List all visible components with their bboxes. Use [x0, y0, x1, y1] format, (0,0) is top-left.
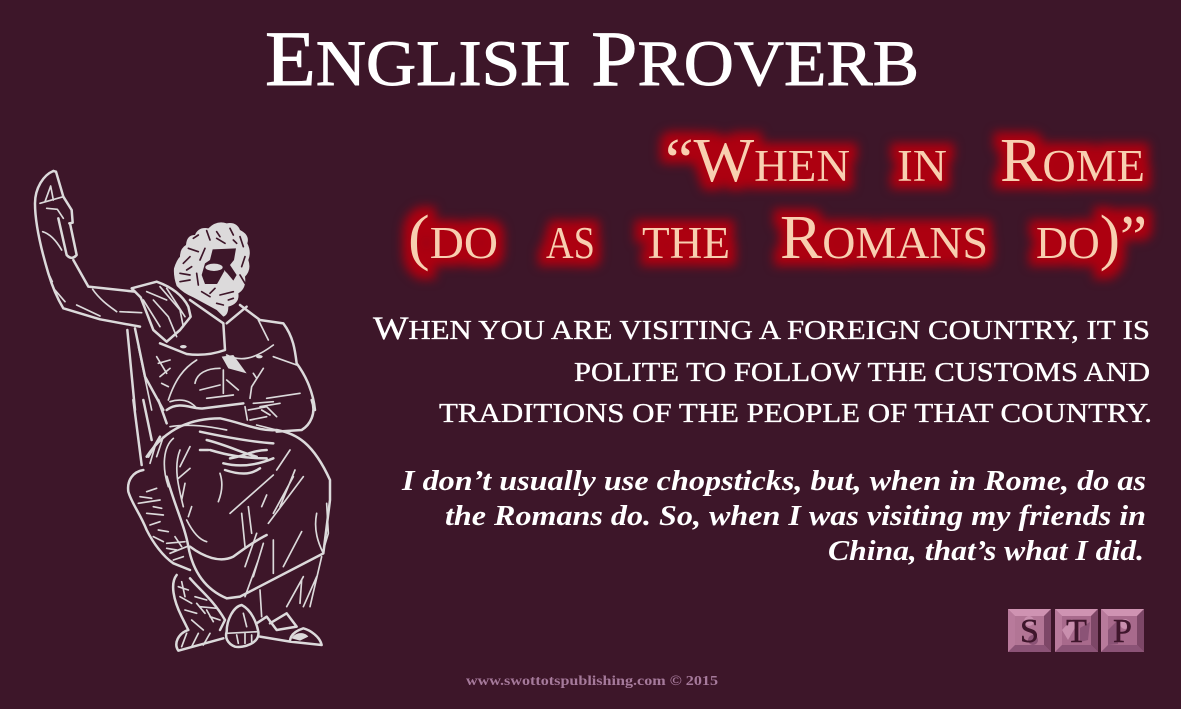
- tile P: P: [1113, 613, 1132, 650]
- example sentence: the Romans do. So, when I was visiting my friends in: [445, 501, 1146, 532]
- folds: [200, 432, 273, 474]
- right foot: [226, 605, 258, 647]
- chair drapery: [127, 328, 163, 410]
- statue upper body: [35, 171, 315, 410]
- quote line 2: [408, 204, 1147, 272]
- definition text: POLITE TO FOLLOW THE CUSTOMS AND: [574, 357, 1150, 387]
- illustration: Roman statue: [35, 171, 330, 651]
- head: hair and beard: [174, 222, 250, 317]
- lower legs: [260, 557, 322, 617]
- abdominals: [168, 360, 300, 408]
- shoulder drape: [132, 282, 191, 342]
- raised arm and scroll: [35, 171, 140, 327]
- example sentence: I don’t usually use chopsticks, but, when in Rome, do as: [401, 466, 1146, 497]
- quote line 1: [665, 127, 1145, 195]
- quote line 2: DO)”: [1036, 204, 1147, 272]
- proverb quote: [408, 127, 1147, 272]
- definition text: TRADITIONS OF THE PEOPLE OF THAT COUNTRY.: [439, 398, 1152, 428]
- quote line 1: ROME: [1000, 127, 1145, 195]
- quote line 1: IN: [897, 141, 947, 191]
- quote line 2: ROMANS: [780, 204, 988, 272]
- example sentence: [401, 466, 1146, 567]
- quote line 2: AS: [546, 218, 595, 268]
- website credit: www.swottotspublishing.com © 2015: [466, 674, 718, 689]
- left foot: [173, 575, 225, 651]
- quote line 2: (DO: [408, 204, 498, 272]
- statue lower body: [128, 400, 330, 651]
- example sentence: China, that’s what I did.: [828, 536, 1144, 567]
- tile T: T: [1066, 613, 1087, 650]
- torso: [190, 300, 315, 410]
- title: ENGLISH PROVERB: [265, 15, 919, 102]
- definition text: WHEN YOU ARE VISITING A FOREIGN COUNTRY, IT IS: [373, 311, 1150, 347]
- drapery over lap: [147, 418, 330, 598]
- seat and rock: [128, 470, 190, 570]
- definition text: [373, 311, 1152, 428]
- quote line 1: “WHEN: [665, 127, 850, 195]
- quote line 2: THE: [642, 218, 730, 268]
- forearm and hand: [167, 400, 313, 432]
- tile S: S: [1020, 613, 1039, 650]
- logo: STP tiles: [1008, 609, 1144, 652]
- far foot: [257, 613, 322, 645]
